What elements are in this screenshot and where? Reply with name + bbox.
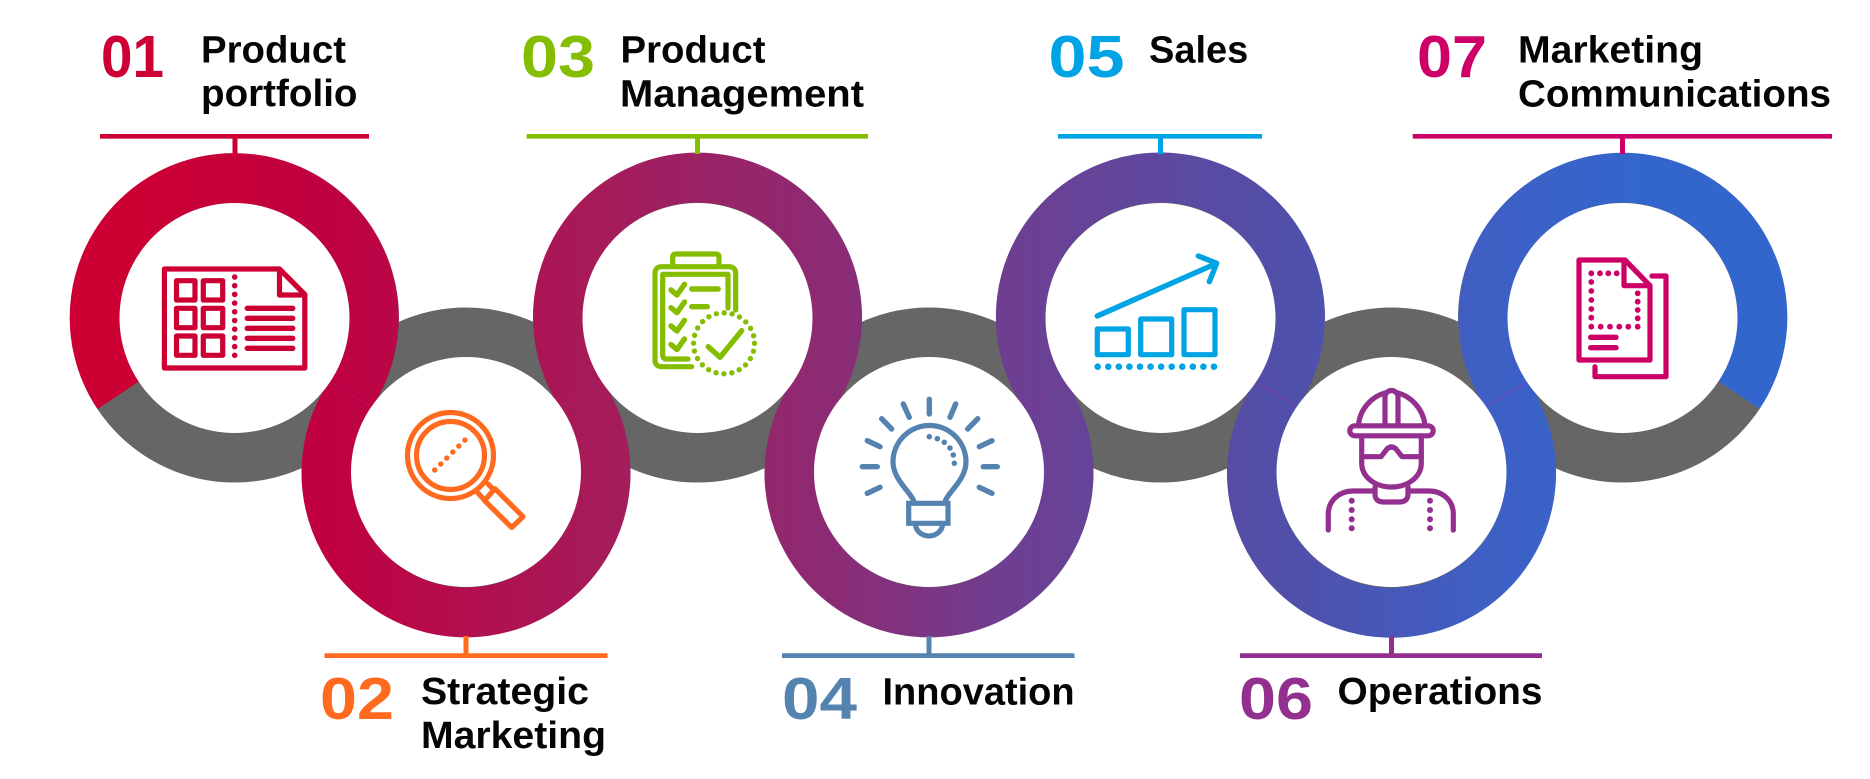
heading: marketing communications bbox=[1518, 30, 1831, 116]
leader line 03 bbox=[527, 134, 868, 154]
number 02: 02 bbox=[320, 666, 394, 732]
leader line 05 bbox=[1058, 134, 1262, 154]
step 06: operations bbox=[1239, 391, 1542, 732]
step 07: marketing communications bbox=[1413, 24, 1832, 377]
white circle interiors bbox=[120, 203, 1738, 587]
heading: product portfolio bbox=[201, 30, 358, 115]
heading: product portfolio: portfolio bbox=[201, 73, 358, 115]
icon: growth chart bbox=[1097, 256, 1217, 367]
step 01: product portfolio bbox=[100, 24, 369, 368]
icon: light bulb bbox=[862, 399, 997, 536]
gray background rings bbox=[95, 178, 1762, 612]
gradient ribbon linking the seven circles bbox=[95, 177, 1762, 613]
number 06: 06 bbox=[1239, 666, 1313, 732]
number 01: 01 bbox=[101, 24, 164, 90]
leader line 04 bbox=[782, 636, 1074, 658]
leader line 02 bbox=[324, 636, 608, 658]
icon: checklist clipboard bbox=[655, 254, 754, 374]
heading: marketing communications: Communications bbox=[1518, 74, 1831, 116]
icon: portfolio document bbox=[164, 269, 305, 368]
number 07: 07 bbox=[1417, 24, 1487, 90]
leader line 01 bbox=[100, 134, 369, 154]
heading: marketing communications: Marketing bbox=[1518, 30, 1703, 72]
step 02: strategic marketing bbox=[320, 412, 608, 757]
heading: product management: Product bbox=[620, 30, 766, 72]
heading: product management bbox=[620, 30, 864, 116]
number 05: 05 bbox=[1048, 24, 1124, 90]
leader line 06 bbox=[1240, 636, 1542, 658]
heading: sales: Sales bbox=[1149, 30, 1248, 72]
heading: product portfolio: Product bbox=[201, 30, 346, 72]
number 04: 04 bbox=[782, 666, 857, 732]
leader line 07 bbox=[1413, 134, 1832, 154]
heading: strategic marketing: Marketing bbox=[421, 715, 606, 757]
heading: strategic marketing bbox=[421, 671, 606, 757]
icon: worker with hard hat bbox=[1328, 391, 1453, 531]
icon: stacked documents bbox=[1579, 260, 1666, 377]
heading: innovation: Innovation bbox=[882, 672, 1075, 714]
step 04: innovation bbox=[782, 399, 1075, 732]
step 05: sales bbox=[1048, 24, 1262, 367]
step 03: product management bbox=[521, 24, 868, 374]
heading: product management: Management bbox=[620, 74, 864, 116]
heading: strategic marketing: Strategic bbox=[421, 671, 589, 713]
heading: operations: Operations bbox=[1338, 671, 1542, 713]
number 03: 03 bbox=[521, 24, 595, 90]
icon: magnifying glass bbox=[408, 412, 523, 528]
